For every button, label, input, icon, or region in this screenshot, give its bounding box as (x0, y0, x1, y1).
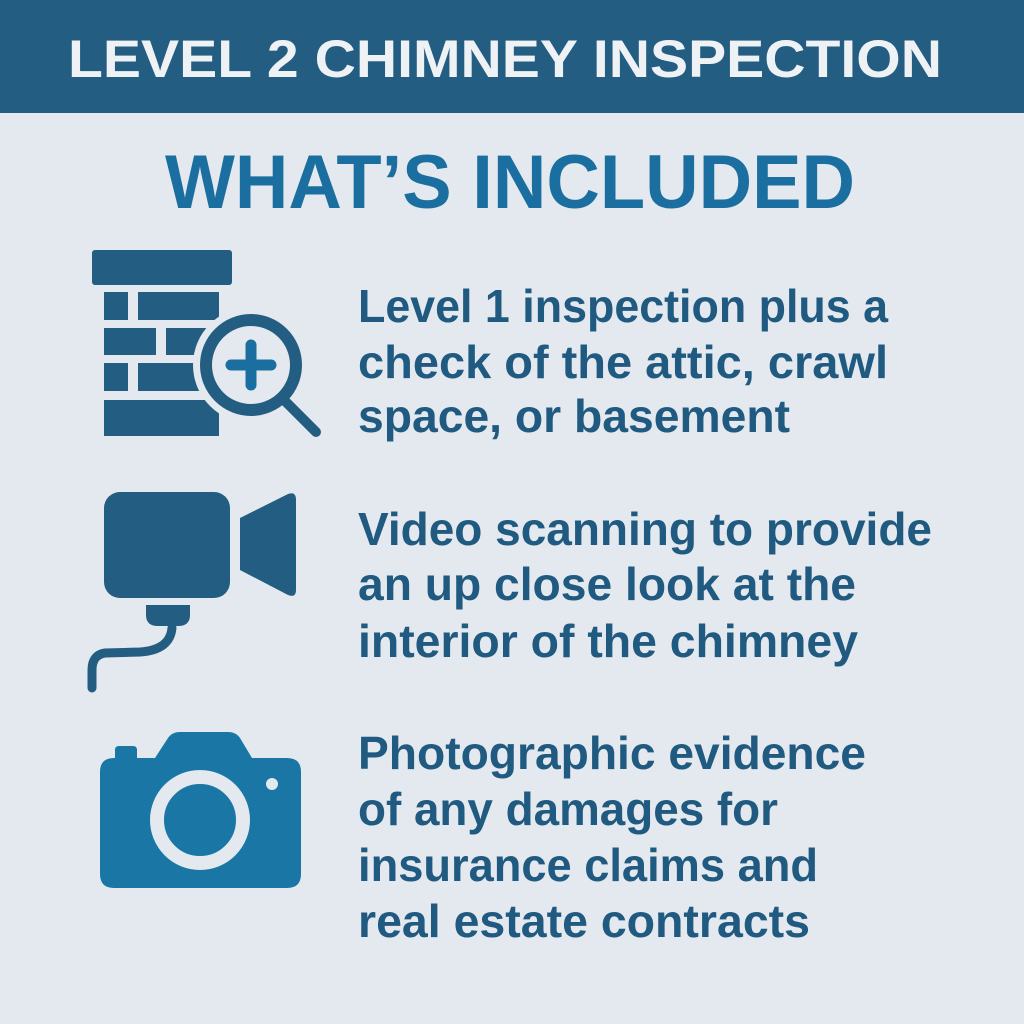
text: item 3: real estate contracts (358, 895, 810, 947)
icon: video camera (92, 492, 296, 688)
header title: LEVEL 2 CHIMNEY INSPECTION (68, 30, 942, 89)
text: item 2: Video scanning to provide (358, 503, 932, 555)
text: item 1: Level 1 inspection plus a (358, 280, 888, 332)
icon: chimney with magnifier (92, 250, 316, 436)
text: item 3: Photographic evidence (358, 727, 866, 779)
text: item 1: check of the attic, crawl (358, 336, 888, 388)
text: item 2: interior of the chimney (358, 615, 858, 667)
text: item 3: insurance claims and (358, 839, 818, 891)
subtitle: WHAT’S INCLUDED (165, 140, 855, 225)
text: item 2: an up close look at the (358, 558, 856, 610)
text: item 3 (358, 727, 866, 947)
icon: photo camera (100, 732, 301, 888)
text: item 1: space, or basement (358, 390, 790, 442)
text: item 2 (358, 503, 932, 667)
text: item 3: of any damages for (358, 783, 778, 835)
text: item 1 (358, 280, 888, 442)
header band (0, 0, 1024, 113)
